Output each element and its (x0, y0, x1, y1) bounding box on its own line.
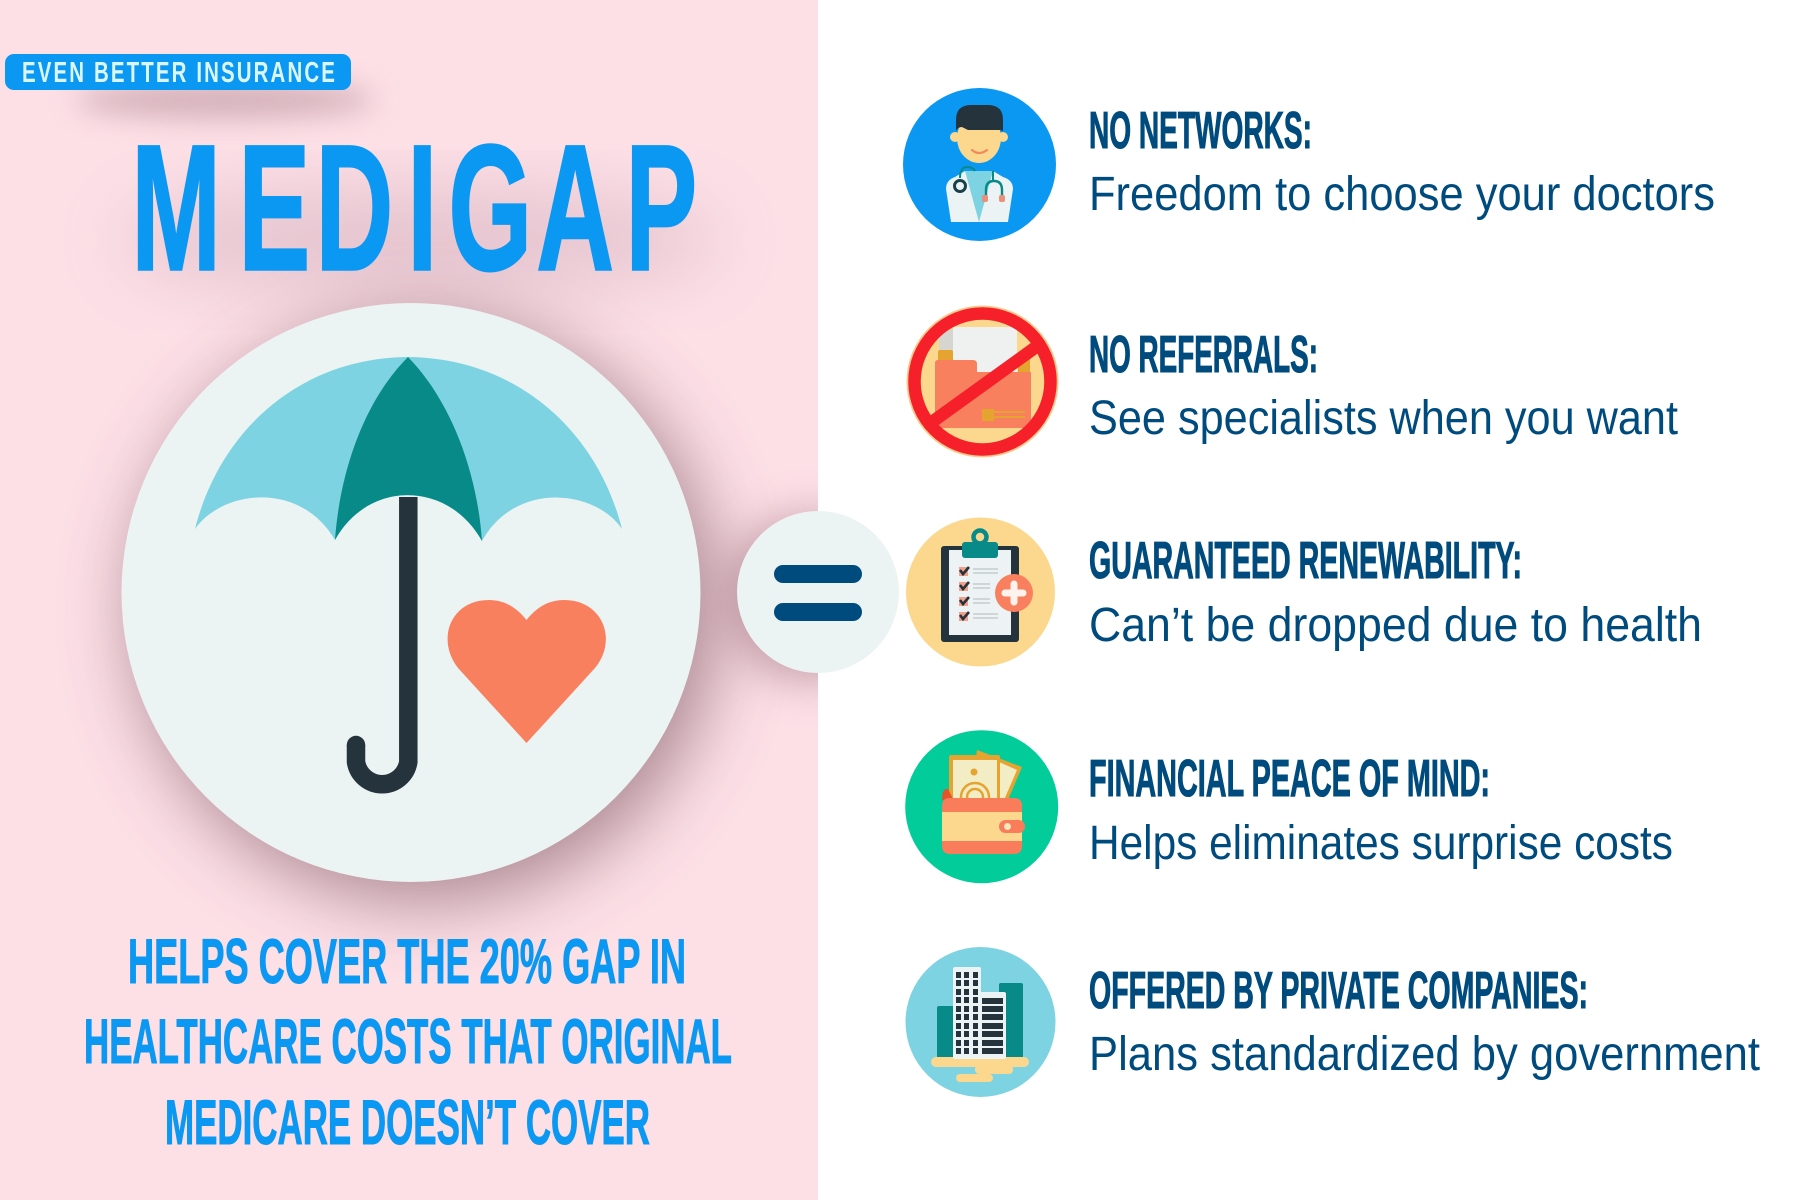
icon: umbrella (195, 357, 622, 784)
soft shadows on the pink panel (75, 82, 890, 902)
title: MEDIGAP: MEDIGAP (131, 108, 697, 308)
text: offered by private companies (1089, 962, 1760, 1081)
badge: even better insurance: EVEN BETTER INSURANCE (22, 57, 337, 89)
caption: gap description (84, 927, 732, 1158)
text: financial peace of mind (1089, 750, 1673, 870)
text: guaranteed renewability: Can’t be dropped due to health (1089, 599, 1702, 652)
text: no referrals (1089, 326, 1678, 445)
text: no referrals: See specialists when you want (1089, 392, 1678, 445)
panel: pink left background (0, 0, 818, 1200)
icon: doctor (903, 88, 1056, 241)
text: no networks (1089, 102, 1715, 221)
text: no networks: Freedom to choose your doctors (1089, 168, 1715, 221)
icon: wallet with cash (905, 730, 1058, 883)
badge: even better insurance (5, 54, 351, 90)
text: guaranteed renewability (1089, 532, 1702, 652)
caption: gap description: HELPS COVER THE 20% GAP IN (128, 927, 686, 997)
icon: clipboard checklist (906, 518, 1055, 666)
equals sign circle (737, 511, 899, 673)
text: financial peace of mind: Helps eliminates surprise costs (1089, 817, 1673, 870)
text: no networks: NO NETWORKS: (1089, 102, 1312, 160)
caption: gap description: HEALTHCARE COSTS THAT ORIGINAL (84, 1007, 732, 1077)
big circle with umbrella and heart (122, 303, 700, 882)
icon: heart (448, 600, 606, 743)
caption: gap description: MEDICARE DOESN’T COVER (165, 1088, 650, 1158)
text: financial peace of mind: FINANCIAL PEACE OF MIND: (1089, 750, 1490, 808)
icon: office buildings (906, 947, 1056, 1097)
text: no referrals: NO REFERRALS: (1089, 326, 1318, 384)
icon: no referrals folder (906, 306, 1058, 458)
